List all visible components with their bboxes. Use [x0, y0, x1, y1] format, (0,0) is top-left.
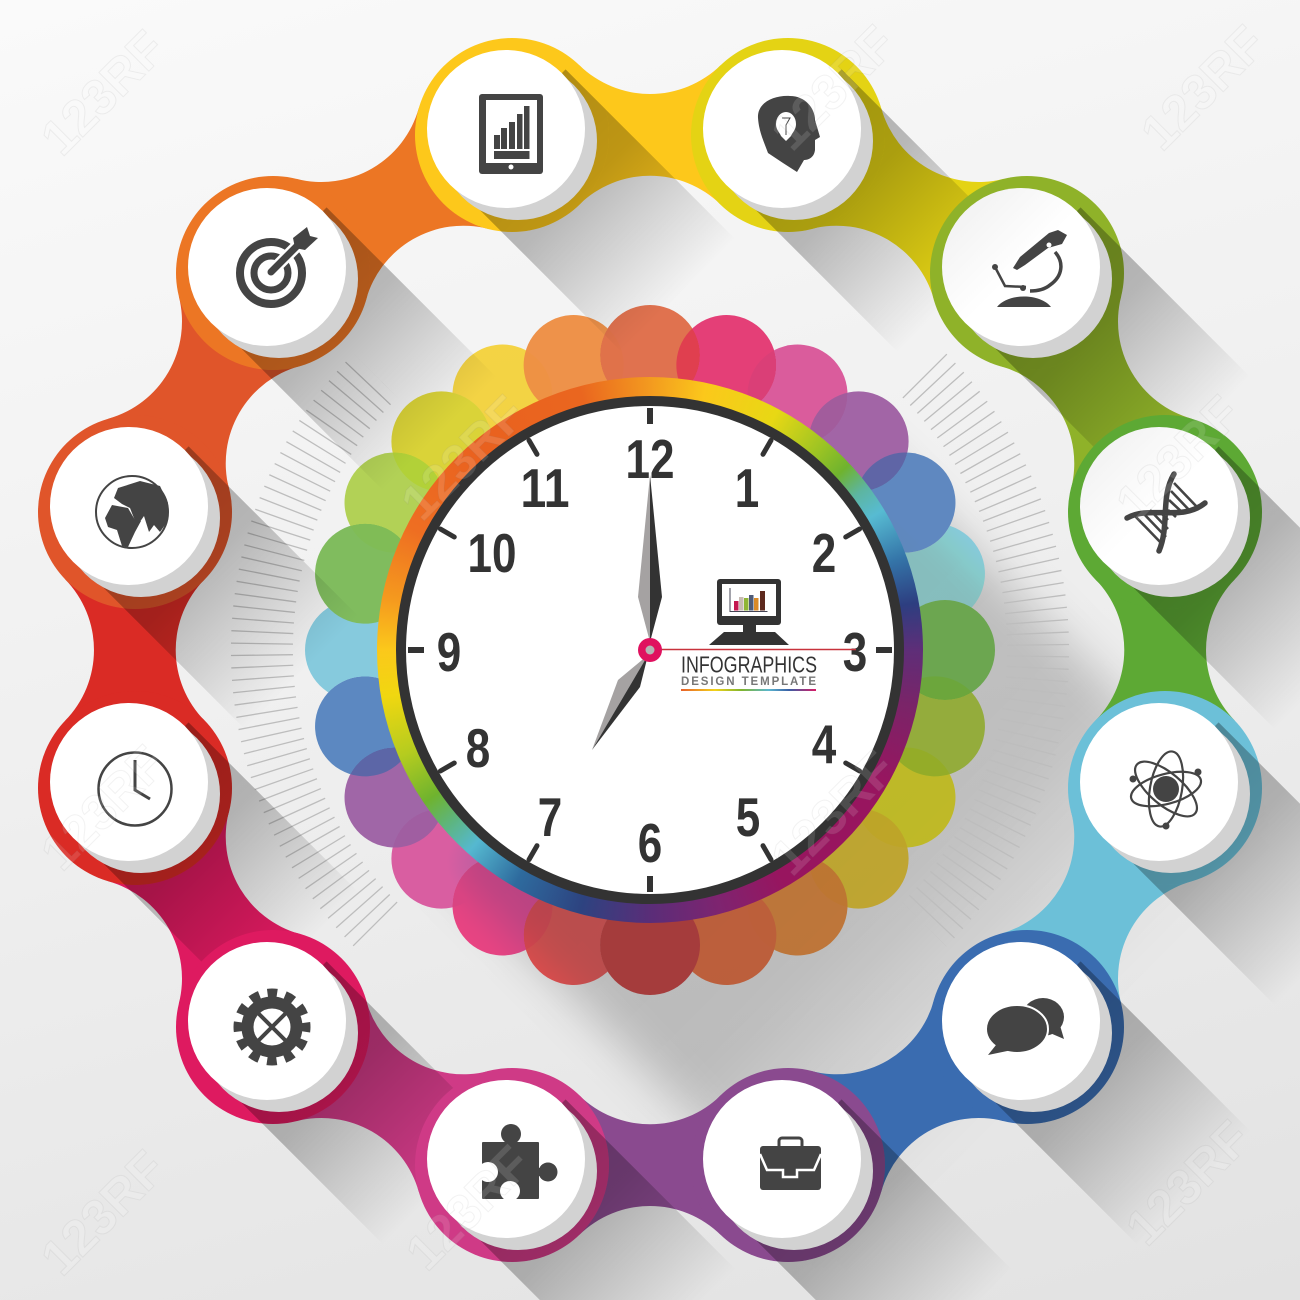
minute hand	[638, 475, 662, 642]
hour hand	[592, 655, 648, 750]
watermarks: 123RF	[30, 20, 176, 166]
watermarks: 123RF	[760, 15, 906, 161]
watermarks: 123RF	[760, 740, 906, 886]
flower long shadow	[438, 438, 1258, 1258]
clock rainbow bezel	[377, 377, 923, 923]
title: infographics: DESIGN TEMPLATE	[681, 676, 816, 688]
icon: head with light bulb	[758, 96, 820, 172]
clock numerals: 12	[626, 428, 674, 490]
clock numerals: 11	[520, 457, 570, 519]
watermarks: 123RF	[390, 385, 536, 531]
icon: briefcase	[760, 1138, 821, 1190]
clock numerals: 5	[736, 786, 760, 848]
petal flower	[304, 304, 996, 996]
hour ticks	[408, 408, 892, 892]
monitor icon	[709, 579, 789, 645]
watermarks: 123RF	[395, 1135, 541, 1281]
title: infographics	[681, 652, 817, 691]
clock face	[401, 401, 899, 899]
icon: clock	[98, 752, 172, 826]
clock numerals: 8	[466, 717, 490, 779]
icon: target with arrow	[240, 227, 318, 304]
icon: gear	[238, 994, 306, 1060]
icon: globe	[96, 476, 168, 548]
clock numerals: 10	[468, 522, 516, 584]
title: infographics: INFOGRAPHICS	[681, 652, 817, 678]
clock numerals: 4	[812, 713, 837, 775]
icon: atom	[1127, 749, 1205, 830]
clock numerals: 9	[437, 621, 461, 683]
clock numerals: 6	[638, 812, 662, 874]
icon: speech bubbles	[986, 998, 1064, 1055]
clock centre pin	[638, 638, 662, 662]
watermarks: 123RF	[30, 735, 176, 881]
watermarks: 123RF	[1105, 385, 1251, 531]
watermarks: 123RF	[30, 1140, 176, 1286]
radial hatching halo	[262, 376, 1038, 924]
watermarks: 123RF	[1130, 15, 1276, 161]
clock numerals: 2	[812, 522, 836, 584]
icon: puzzle piece	[476, 1124, 558, 1202]
clock numerals: 7	[538, 786, 562, 848]
icon: tablet with bar chart	[479, 94, 543, 174]
icon: microscope	[992, 230, 1067, 307]
watermarks: 123RF	[1115, 1110, 1261, 1256]
clock numerals: 3	[843, 621, 867, 683]
clock numerals	[437, 428, 867, 874]
pointer line to numeral 3	[650, 648, 856, 650]
icon: DNA helix	[1127, 474, 1205, 551]
clock numerals: 1	[735, 457, 759, 519]
